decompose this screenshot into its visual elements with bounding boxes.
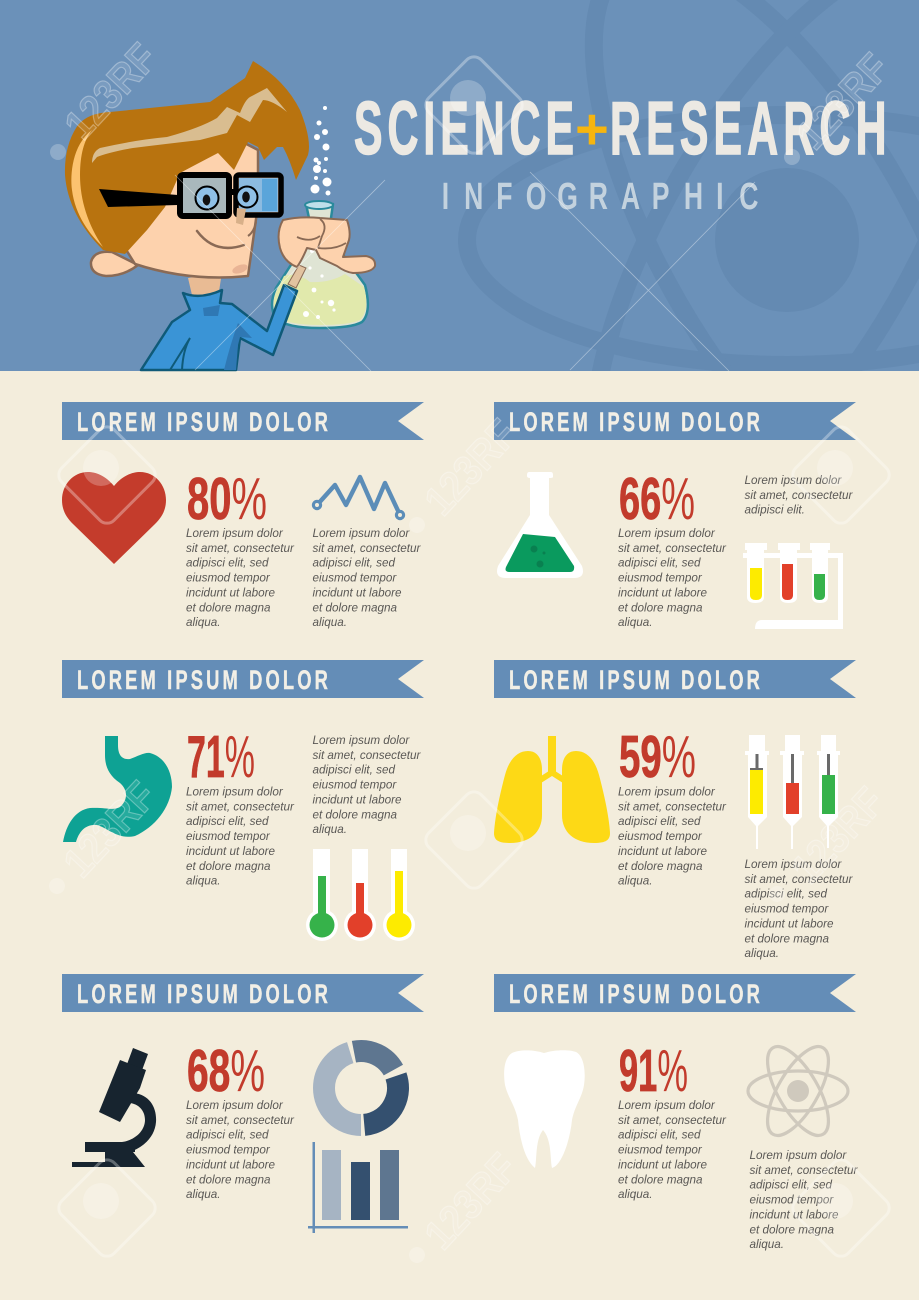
banner title: LOREM IPSUM DOLOR (77, 406, 328, 437)
mouth (197, 231, 244, 248)
text block: Lorem ipsum dolor (186, 1099, 284, 1112)
header background (0, 0, 919, 371)
title: science: SCIENCE (354, 86, 574, 170)
watermark logos: 123RF (54, 772, 165, 886)
stat 66%: 66% (619, 466, 695, 532)
subtitle: INFOGRAPHIC (442, 174, 758, 217)
text block: eiusmod tempor (186, 572, 271, 585)
text block: aliqua. (186, 1188, 220, 1201)
left eye (196, 186, 218, 210)
watermark logos: 123RF (415, 1144, 526, 1258)
text block: adipisci elit. (744, 504, 805, 517)
text block: incidunt ut labore (312, 586, 402, 599)
text block: aliqua. (750, 1238, 784, 1251)
stat 80%: 80% (187, 466, 267, 532)
watermark logos: 123RF (782, 778, 893, 892)
panel: microscope (62, 974, 424, 1233)
icon: tooth (504, 1050, 585, 1168)
text block: eiusmod tempor (186, 830, 271, 843)
banner title: LOREM IPSUM DOLOR (509, 978, 760, 1009)
donut chart (314, 1041, 408, 1135)
text block: sit amet, consectetur (618, 800, 727, 813)
flask glass (272, 204, 368, 328)
text block: sit amet, consectetur (744, 489, 853, 502)
text block: sit amet, consectetur (312, 542, 421, 555)
text block: et dolore magna (186, 860, 271, 873)
panel: stomach (62, 660, 424, 941)
flask liquid (274, 274, 366, 325)
finger lines (297, 219, 346, 248)
text block: eiusmod tempor (618, 830, 703, 843)
text block: et dolore magna (312, 808, 397, 821)
text block: sit amet, consectetur (750, 1164, 858, 1177)
bar chart (308, 1142, 408, 1233)
text block: sit amet, consectetur (744, 873, 853, 886)
glasses temple (99, 189, 178, 207)
flask (272, 106, 368, 328)
neck (188, 272, 222, 299)
text block: adipisci elit, sed (744, 888, 828, 901)
icon: atom (748, 1038, 848, 1144)
text block: aliqua. (312, 823, 347, 836)
text block: adipisci elit, sed (186, 1129, 269, 1142)
right lens tint (239, 178, 278, 212)
cheek (231, 263, 249, 275)
wrist (288, 265, 306, 288)
banner title: LOREM IPSUM DOLOR (77, 978, 328, 1009)
title: plus: + (575, 97, 609, 162)
text block: aliqua. (618, 1188, 652, 1201)
glasses bridge (229, 189, 237, 195)
text block: sit amet, consectetur (186, 800, 295, 813)
banner (494, 660, 856, 698)
text block: incidunt ut labore (618, 1158, 708, 1171)
text block: incidunt ut labore (186, 586, 276, 599)
text block: aliqua. (186, 616, 220, 629)
text block: sit amet, consectetur (618, 1114, 727, 1127)
text block: incidunt ut labore (618, 845, 708, 858)
banner (62, 660, 424, 698)
text block: Lorem ipsum dolor (750, 1149, 847, 1162)
watermark logos: 123RF (55, 34, 166, 148)
text block: Lorem ipsum dolor (744, 474, 842, 487)
hair highlight (92, 88, 287, 163)
text block: Lorem ipsum dolor (312, 734, 410, 747)
text block: adipisci elit, sed (186, 557, 269, 570)
header panel (0, 0, 919, 580)
hair side band (71, 130, 103, 247)
ear (91, 252, 138, 276)
stat 71%: 71% (187, 724, 255, 790)
text block: sit amet, consectetur (312, 749, 421, 762)
text block: Lorem ipsum dolor (186, 786, 284, 798)
banner (62, 974, 424, 1012)
panel: tooth (494, 974, 858, 1251)
text block: adipisci elit, sed (186, 815, 269, 828)
flask rim (305, 201, 333, 209)
text block: Lorem ipsum dolor (618, 527, 716, 540)
title: research: RESEARCH (610, 86, 886, 170)
banner title: LOREM IPSUM DOLOR (77, 664, 328, 695)
icon: test tube rack (743, 543, 843, 629)
text block: incidunt ut labore (750, 1208, 839, 1221)
text block: incidunt ut labore (618, 586, 708, 599)
right lens (236, 175, 281, 215)
text block: sit amet, consectetur (186, 542, 295, 555)
text block: eiusmod tempor (744, 903, 829, 916)
watermark logos: 123RF (787, 44, 898, 158)
text block: aliqua. (618, 875, 652, 888)
sweater arm line (170, 338, 190, 370)
glasses (99, 175, 281, 216)
text block: et dolore magna (618, 601, 703, 614)
text block: aliqua. (618, 616, 652, 629)
text block: et dolore magna (744, 932, 829, 945)
background atom motif (646, 261, 647, 262)
text block: eiusmod tempor (312, 779, 397, 792)
stat 59%: 59% (619, 724, 696, 790)
hair (65, 61, 309, 254)
face (120, 120, 258, 278)
flask bubbles (303, 106, 336, 319)
text block: Lorem ipsum dolor (618, 786, 716, 798)
hand (279, 217, 375, 273)
text block: et dolore magna (618, 860, 703, 873)
text block: et dolore magna (312, 601, 397, 614)
stat 68%: 68% (187, 1038, 265, 1104)
text block: incidunt ut labore (744, 917, 834, 930)
text block: et dolore magna (750, 1223, 834, 1236)
icon: stomach (63, 736, 172, 842)
text block: aliqua. (186, 875, 220, 888)
text block: Lorem ipsum dolor (744, 858, 842, 871)
text block: et dolore magna (618, 1173, 703, 1186)
text block: sit amet, consectetur (186, 1114, 295, 1127)
sweater (141, 285, 297, 370)
banner title: LOREM IPSUM DOLOR (509, 406, 760, 437)
icon: thermometers (306, 849, 415, 941)
banner (494, 402, 856, 440)
nose (236, 208, 246, 225)
text block: adipisci elit, sed (312, 557, 396, 570)
text block: eiusmod tempor (312, 572, 397, 585)
text block: incidunt ut labore (186, 845, 276, 858)
text block: adipisci elit, sed (618, 557, 701, 570)
text block: Lorem ipsum dolor (312, 527, 410, 540)
text block: adipisci elit, sed (618, 815, 701, 828)
text block: et dolore magna (186, 601, 271, 614)
banner (494, 974, 856, 1012)
banner (62, 402, 424, 440)
header crossing lines (175, 172, 755, 371)
icon: syringes (745, 735, 840, 849)
text block: incidunt ut labore (186, 1158, 276, 1171)
left lens (180, 175, 229, 216)
text block: aliqua. (744, 947, 779, 960)
text block: eiusmod tempor (186, 1144, 271, 1157)
panel: flask (494, 402, 856, 629)
text block: eiusmod tempor (618, 572, 703, 585)
icon: erlenmeyer flask (497, 472, 583, 578)
right eye (236, 186, 258, 208)
sweater shading (203, 305, 252, 370)
text block: eiusmod tempor (618, 1144, 703, 1157)
text block: adipisci elit, sed (750, 1179, 833, 1192)
text block: adipisci elit, sed (618, 1129, 701, 1142)
scientist character (65, 61, 375, 370)
text block: et dolore magna (186, 1173, 271, 1186)
panel: lungs (494, 660, 856, 960)
text block: Lorem ipsum dolor (186, 527, 284, 540)
stat 91%: 91% (619, 1038, 688, 1104)
panel: heart (62, 402, 424, 629)
text block: sit amet, consectetur (618, 542, 727, 555)
text block: Lorem ipsum dolor (618, 1099, 716, 1112)
icon: lungs (494, 736, 610, 843)
line chart icon (313, 477, 404, 519)
text block: eiusmod tempor (750, 1194, 834, 1207)
text block: adipisci elit, sed (312, 764, 396, 777)
text block: aliqua. (312, 616, 347, 629)
icon: heart (62, 472, 166, 564)
watermark logos: 123RF (415, 410, 526, 524)
text block: incidunt ut labore (312, 793, 402, 806)
icon: microscope (72, 1048, 156, 1167)
banner title: LOREM IPSUM DOLOR (509, 664, 760, 695)
